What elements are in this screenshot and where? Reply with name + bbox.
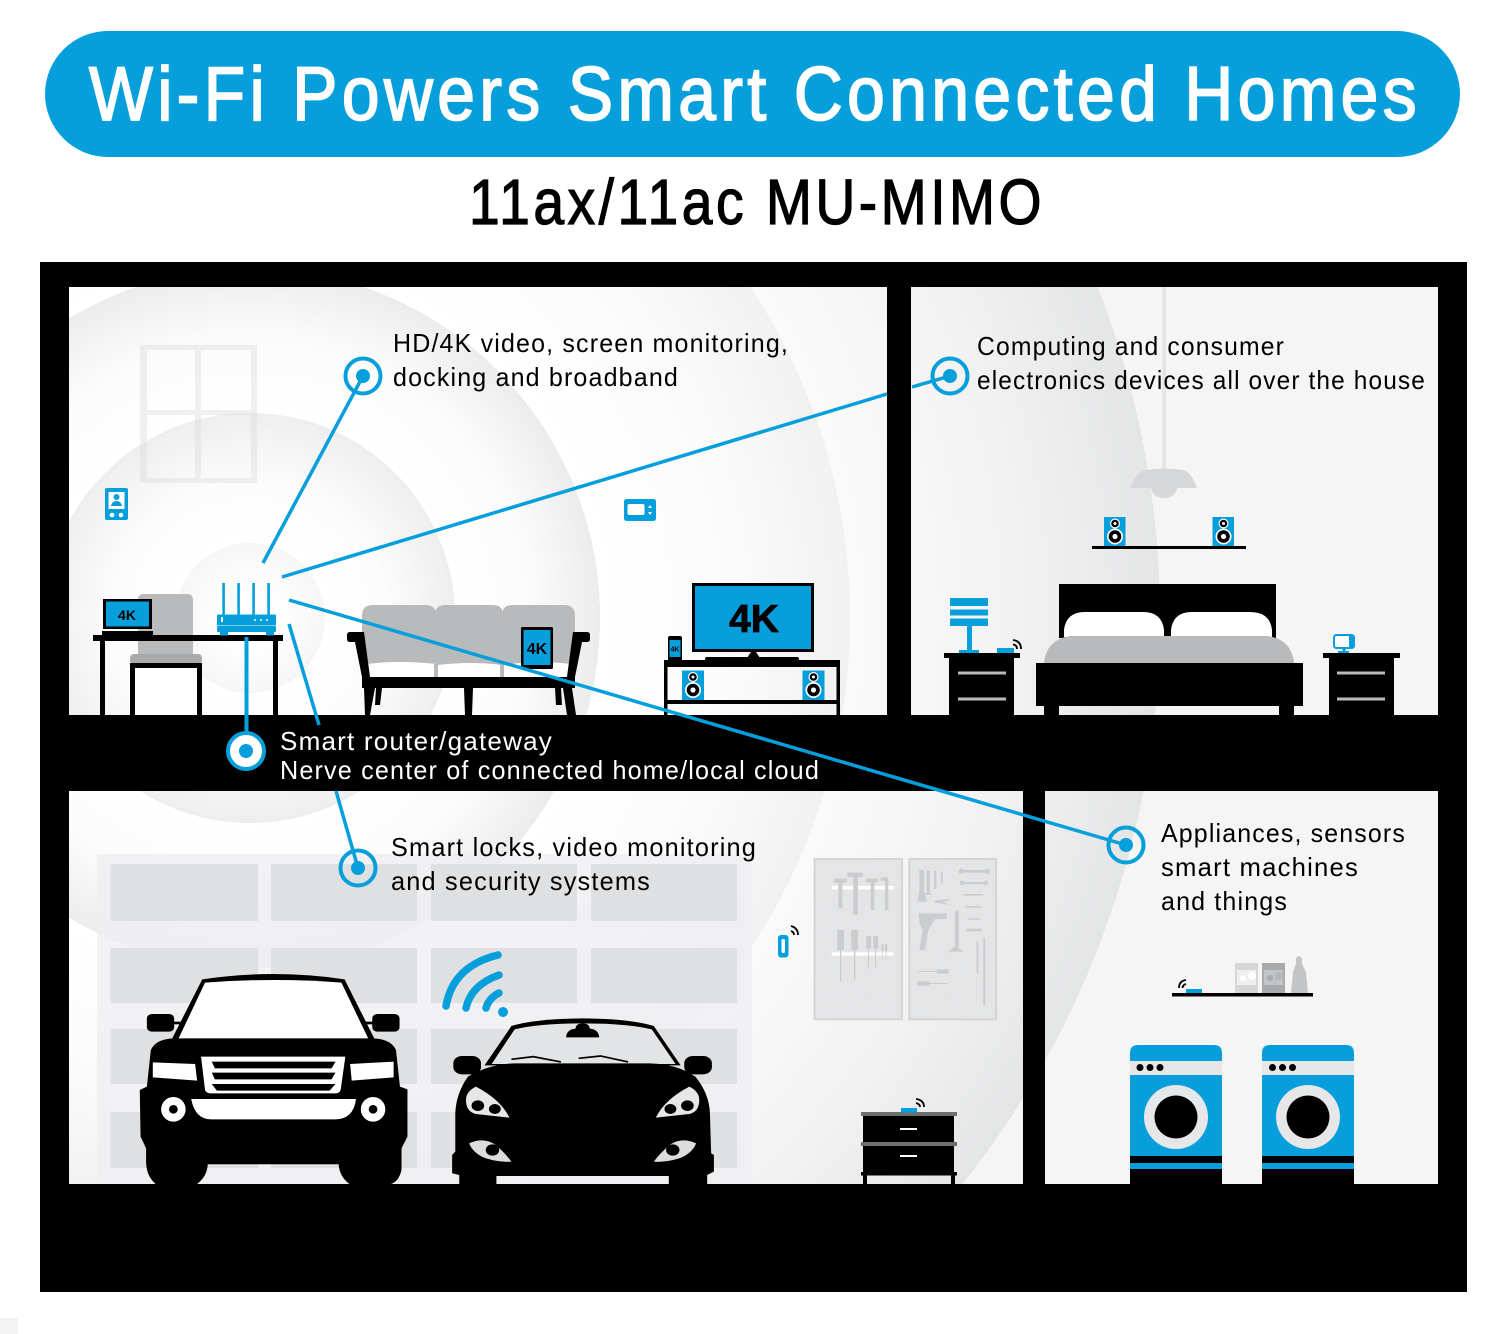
- sofa: [347, 605, 590, 715]
- text: appliances: [1161, 818, 1406, 916]
- icon: door sensor: [778, 926, 798, 958]
- room backgrounds with signal rings: [69, 287, 1438, 1184]
- tv with 4K: 4K: [729, 598, 779, 641]
- text: security: Smart locks, video monitoring: [391, 832, 757, 862]
- washing machine: [1262, 1045, 1354, 1184]
- ceiling lamp: [1130, 287, 1197, 498]
- right nightstand with small tv: [1323, 635, 1400, 715]
- icon: speaker: [1212, 517, 1234, 546]
- title banner: [45, 31, 1460, 157]
- shelf with speakers: [1092, 517, 1246, 549]
- icon: speaker: [1104, 517, 1126, 546]
- node: security: [340, 850, 376, 886]
- corner mark: [0, 1318, 18, 1334]
- sports car: [452, 1018, 714, 1184]
- tv stand with speakers: [664, 660, 840, 715]
- text: appliances: Appliances, sensors: [1161, 818, 1406, 848]
- text: video: HD/4K video, screen monitoring,: [393, 328, 789, 358]
- left nightstand with lamp: [944, 598, 1021, 715]
- router: [217, 583, 276, 636]
- desk with chair: [93, 594, 283, 715]
- text: computing: electronics devices all over the house: [977, 365, 1426, 395]
- house outline: [40, 262, 1467, 1292]
- text: computing: Computing and consumer: [977, 331, 1285, 361]
- connector lines: [246, 376, 1126, 868]
- pegboard: hand tools: [815, 859, 902, 1019]
- panel: garage: [97, 854, 996, 1184]
- subtitle: 11ax/11ac MU-MIMO: [469, 166, 1045, 238]
- node: router: [228, 733, 264, 769]
- icon: video doorbell: [105, 488, 128, 520]
- shelf with hub and supplies: [1172, 956, 1313, 996]
- node: video: [346, 358, 380, 394]
- text: video: docking and broadband: [393, 362, 679, 392]
- text: router: [280, 726, 820, 785]
- suv: [140, 974, 407, 1184]
- tablet: 4K: [527, 641, 548, 658]
- text: security: and security systems: [391, 866, 651, 896]
- laptop: 4K: [118, 607, 136, 623]
- garage door: [97, 854, 752, 1184]
- tv with 4K: [692, 583, 814, 662]
- node: appliances: [1108, 828, 1144, 862]
- text: appliances: and things: [1161, 886, 1288, 916]
- icon: speaker: [682, 670, 704, 700]
- text: security: [391, 832, 757, 896]
- cabinet: [861, 1099, 957, 1184]
- text: appliances: smart machines: [1161, 852, 1359, 882]
- window: [140, 345, 257, 483]
- text: router: Nerve center of connected home/local cloud: [280, 755, 820, 785]
- bed: [1036, 584, 1303, 715]
- text: router: Smart router/gateway: [280, 726, 553, 756]
- icon: thermostat: [624, 499, 656, 521]
- pegboard: power tools: [909, 859, 996, 1019]
- node: devices: [932, 358, 968, 394]
- washing machine: [1130, 1045, 1222, 1184]
- text: video: [393, 328, 789, 392]
- phone: [668, 636, 682, 661]
- laptop: [102, 599, 153, 635]
- phone: 4K: [671, 646, 679, 654]
- text: computing: [977, 331, 1426, 395]
- icon: wifi signal: [446, 955, 508, 1017]
- panel: laundry room: [1130, 956, 1354, 1184]
- panel: living room: [93, 488, 840, 715]
- panel: bedroom: [944, 287, 1400, 715]
- tablet: [521, 627, 553, 669]
- icon: speaker: [802, 670, 824, 700]
